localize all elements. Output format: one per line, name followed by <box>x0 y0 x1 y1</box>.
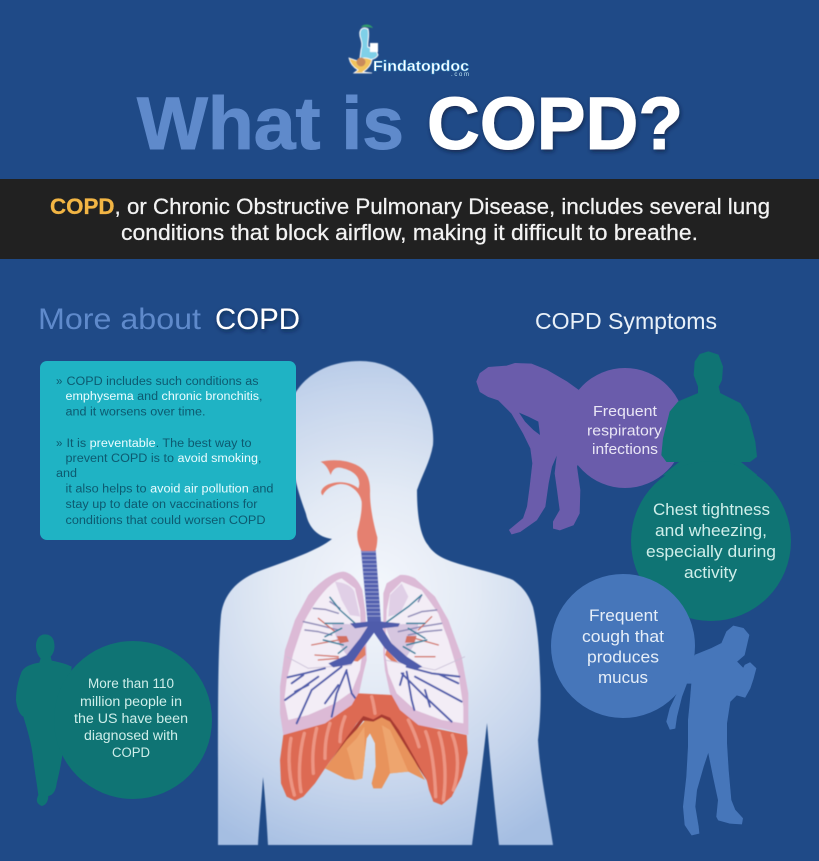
label: cough that <box>582 628 664 646</box>
windpipe <box>361 549 381 623</box>
label: Frequent <box>593 403 658 420</box>
figure: coughing person <box>667 626 756 835</box>
facts text: and it worsens over time. <box>66 406 206 418</box>
diaphragm and organs <box>280 693 468 805</box>
label: More than 110 <box>88 676 174 691</box>
right lung <box>383 575 468 735</box>
icon: duck mascot <box>349 24 378 73</box>
label <box>587 403 663 458</box>
symptom: cough with mucus <box>551 574 756 835</box>
circle: green <box>631 461 791 621</box>
circle: green <box>54 641 212 799</box>
label: COPD <box>112 745 150 760</box>
title: What is: What is <box>137 82 404 165</box>
figure: bent-over person <box>477 363 590 534</box>
bronchi lower branches <box>285 667 462 723</box>
circle: purple <box>565 368 685 488</box>
label: million people in <box>80 694 182 709</box>
orange tissue behind bronchi <box>351 646 399 663</box>
facts text: emphysema and chronic bronchitis , <box>66 391 262 403</box>
lungs and airways <box>280 549 468 735</box>
logo .com: .com <box>451 72 469 78</box>
facts text: it also helps to avoid air pollution and <box>66 484 274 496</box>
title <box>137 82 683 165</box>
upper airways grey <box>303 595 442 635</box>
windpipe rings <box>361 552 381 616</box>
label <box>646 501 776 582</box>
left lung <box>280 572 368 735</box>
statistic: 110 million diagnosed <box>16 634 212 806</box>
heading: More about COPD: More about <box>38 303 202 336</box>
callout: COPD facts box <box>40 361 296 540</box>
facts text: stay up to date on vaccinations for <box>66 499 258 511</box>
lungs illustration <box>280 460 468 805</box>
definition text <box>50 194 770 245</box>
symptom: chest tightness <box>631 352 791 621</box>
diaphragm muscle <box>280 693 468 805</box>
label: activity <box>684 564 738 582</box>
figure: standing person <box>16 634 72 806</box>
facts text: » <box>56 438 62 450</box>
label: Frequent <box>589 607 658 625</box>
upper airways teal <box>323 595 427 653</box>
dark muscle fold <box>325 714 428 782</box>
facts text: conditions that could worsen COPD <box>66 515 266 527</box>
trachea and larynx <box>321 460 377 551</box>
facts text: prevent COPD is to avoid smoking , <box>66 453 262 465</box>
heading: COPD Symptoms: COPD Symptoms <box>535 308 717 334</box>
label: produces <box>587 648 659 666</box>
logo: Findatopdoc <box>349 24 469 78</box>
label <box>582 607 664 687</box>
label: infections <box>592 441 658 458</box>
label: mucus <box>598 669 648 687</box>
logo wordmark: Findatopdoc <box>373 58 469 75</box>
label: Chest tightness <box>653 501 770 519</box>
definition band <box>0 179 819 259</box>
label: the US have been <box>74 711 188 726</box>
artery blobs <box>337 636 417 643</box>
circle: blue <box>551 574 695 718</box>
thin pleura lines <box>287 657 465 670</box>
facts text <box>56 376 274 527</box>
figure: standing person <box>662 352 757 475</box>
facts text: » <box>56 376 62 388</box>
facts text: COPD includes such conditions as <box>66 376 259 388</box>
label: and wheezing, <box>655 522 767 540</box>
label: respiratory <box>587 422 663 440</box>
bronchi main <box>328 622 422 670</box>
label: especially during <box>646 543 776 561</box>
facts text: It is preventable . The best way to <box>66 438 252 450</box>
arteries red <box>312 617 438 660</box>
heading: More about COPD <box>38 303 300 336</box>
definition text: conditions that block airflow, making it difficult to breathe. <box>121 220 698 245</box>
label <box>74 676 188 760</box>
heading: More about COPD: COPD <box>215 303 300 336</box>
human body silhouette <box>218 361 553 845</box>
abdominal organs <box>325 717 425 788</box>
symptom: respiratory infections <box>477 363 685 534</box>
label: diagnosed with <box>84 728 178 743</box>
facts text: and <box>56 468 77 480</box>
definition text: COPD, or Chronic Obstructive Pulmonary Disease, includes several lung <box>50 194 770 219</box>
title: COPD?: COPD? <box>427 82 683 165</box>
